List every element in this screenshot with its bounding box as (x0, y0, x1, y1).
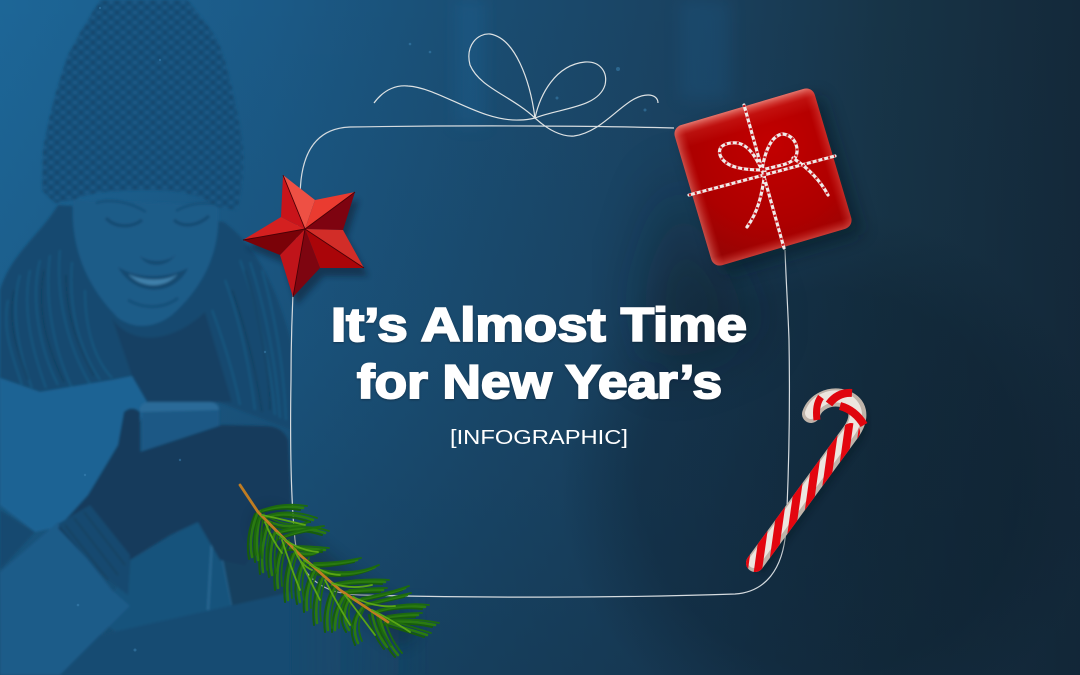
cane shaft stripes (755, 432, 851, 563)
title (331, 298, 747, 408)
subtitle: [INFOGRAPHIC] (450, 426, 628, 449)
hair strands (6, 250, 286, 420)
glove cuff (58, 505, 130, 595)
right eye (174, 216, 209, 225)
cane hook stripes (816, 393, 864, 425)
icon: red gift box (672, 86, 863, 275)
phone (142, 402, 219, 455)
needle fill (255, 505, 439, 653)
teeth (128, 274, 178, 285)
coat right side (100, 520, 292, 635)
face (73, 200, 218, 326)
bow left tail (374, 86, 535, 120)
icon: candy cane (754, 393, 864, 570)
left eye (106, 218, 142, 226)
eyebrows (96, 201, 216, 212)
knit hat (42, 0, 243, 210)
cane shadow (758, 404, 861, 570)
stem (240, 485, 388, 622)
bow right loop (535, 62, 606, 118)
branch shadow (270, 525, 400, 630)
title: It’s Almost Time (331, 298, 747, 351)
snow specks (77, 7, 646, 652)
gift drop shadow (683, 95, 863, 275)
hair (0, 205, 292, 430)
mouth (118, 267, 188, 290)
raised arm sleeve (0, 376, 147, 532)
sleeve lower left (0, 522, 130, 675)
pine branch (240, 485, 439, 657)
gloved hands (58, 408, 291, 592)
dark under right glove (222, 540, 292, 606)
sweater neck (112, 312, 232, 402)
needle backing (248, 509, 432, 657)
dark wedge left (0, 510, 35, 570)
photo: woman with phone (0, 0, 292, 675)
title: for New Year’s (357, 355, 722, 408)
bag (60, 592, 292, 675)
needle body (251, 507, 435, 655)
ribbon bow line art (374, 34, 658, 136)
gift ribbon frame line (291, 126, 789, 597)
bow right tail (535, 95, 658, 136)
icon: red star (243, 175, 368, 305)
twine white base (689, 105, 835, 248)
gift near shadow (640, 170, 760, 370)
twine red dashes (689, 105, 835, 248)
chin shadow (128, 298, 178, 307)
bow left loop (469, 34, 535, 118)
star shadow (247, 183, 368, 305)
strap (208, 540, 232, 610)
nose shadow (140, 254, 176, 265)
bag fade to background (291, 590, 430, 675)
light needles (262, 515, 410, 635)
gift long shadow (560, 210, 1080, 675)
